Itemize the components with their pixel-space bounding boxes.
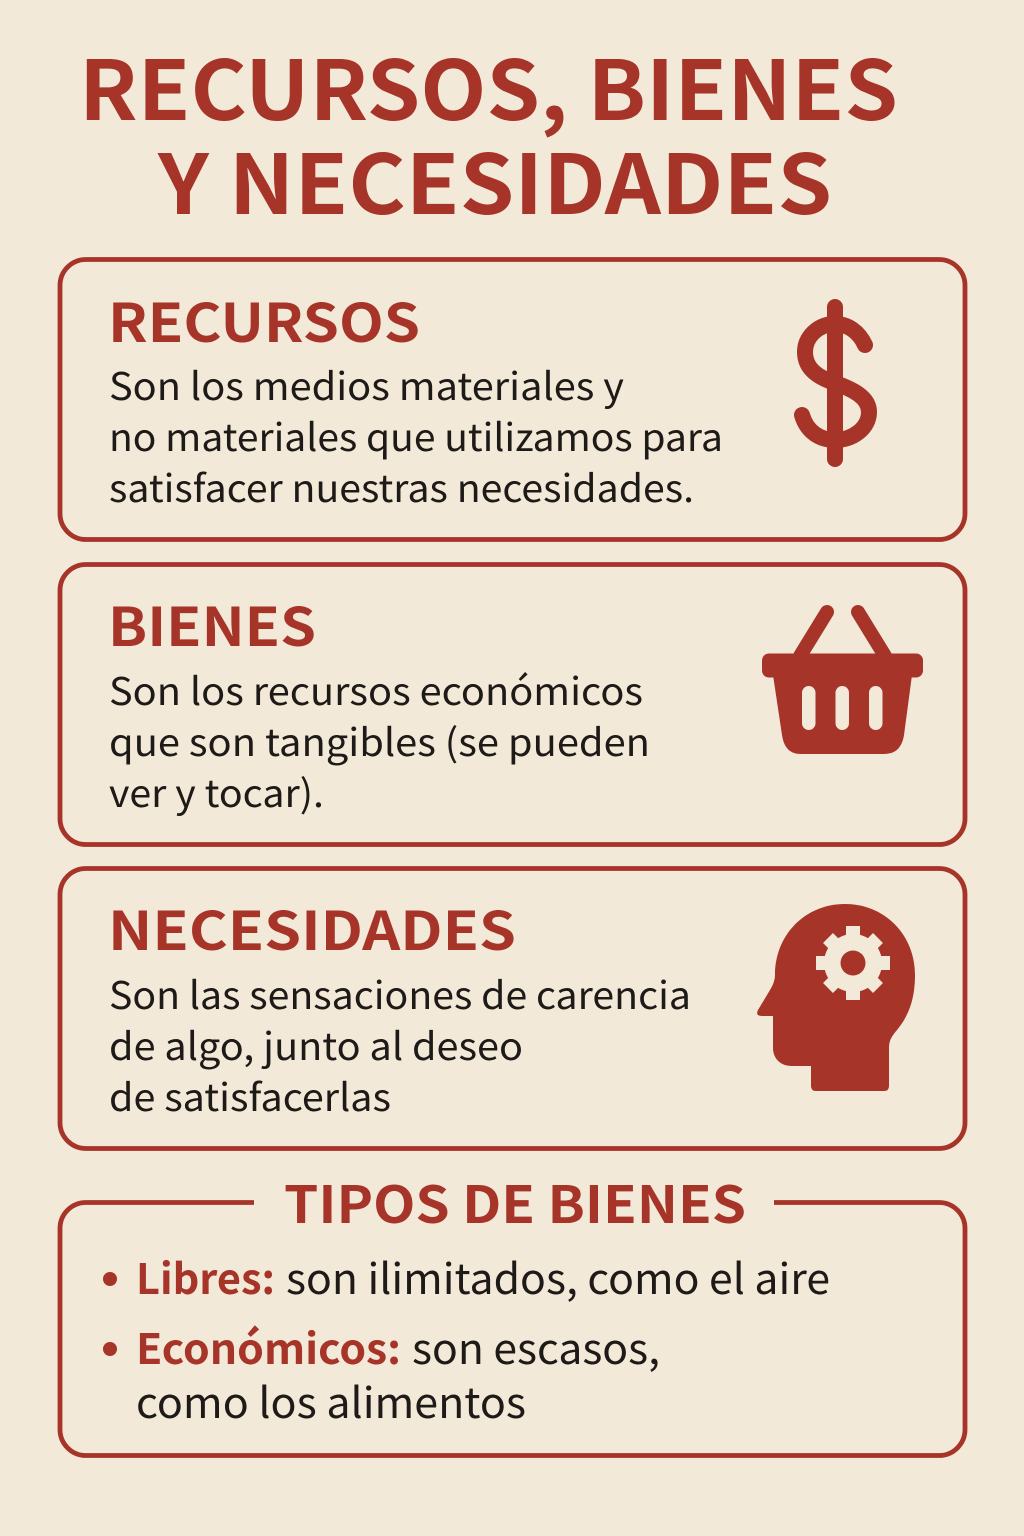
- text: necesidades description: de satisfacerlas: [109, 1067, 391, 1122]
- text: necesidades description: Son las sensaciones de carencia: [109, 965, 691, 1020]
- text: recursos description: Son los medios materiales y: [109, 356, 624, 411]
- panel: necesidades: [60, 868, 965, 1148]
- list item: economicos: [103, 1316, 660, 1431]
- icon: dollar sign: [802, 307, 869, 459]
- text: recursos description: no materiales que utilizamos para: [109, 407, 723, 462]
- list item: economicos: Económicos:: [136, 1316, 401, 1377]
- text: necesidades description: [109, 965, 691, 1122]
- text: recursos description: [109, 356, 723, 513]
- text: bienes description: [109, 661, 650, 818]
- text: bienes description: ver y tocar).: [109, 763, 324, 818]
- icon: shopping basket: [762, 612, 923, 754]
- title: RECURSOS, BIENES: [79, 25, 898, 144]
- title: Y NECESIDADES: [157, 119, 832, 238]
- text: necesidades description: de algo, junto al deseo: [109, 1016, 523, 1071]
- text: bienes description: Son los recursos económicos: [109, 661, 643, 716]
- icon: head with gear: [757, 904, 915, 1091]
- panel: tipos de bienes: [60, 1164, 965, 1456]
- list item: libres: Libres:: [136, 1246, 275, 1307]
- text: bienes description: que son tangibles (se pueden: [109, 712, 650, 767]
- panel: bienes: [60, 564, 965, 844]
- heading: recursos: RECURSOS: [108, 282, 420, 358]
- list item: libres: son ilimitados, como el aire: [286, 1246, 830, 1307]
- panel: recursos: [60, 260, 965, 540]
- heading: bienes: BIENES: [108, 586, 316, 662]
- list item: economicos: como los alimentos: [136, 1370, 526, 1431]
- heading: tipos de bienes: TIPOS DE BIENES: [284, 1164, 746, 1238]
- list item: economicos: son escasos,: [412, 1316, 660, 1377]
- heading: necesidades: NECESIDADES: [108, 890, 516, 966]
- text: recursos description: satisfacer nuestras necesidades.: [109, 458, 694, 513]
- title: [79, 25, 898, 238]
